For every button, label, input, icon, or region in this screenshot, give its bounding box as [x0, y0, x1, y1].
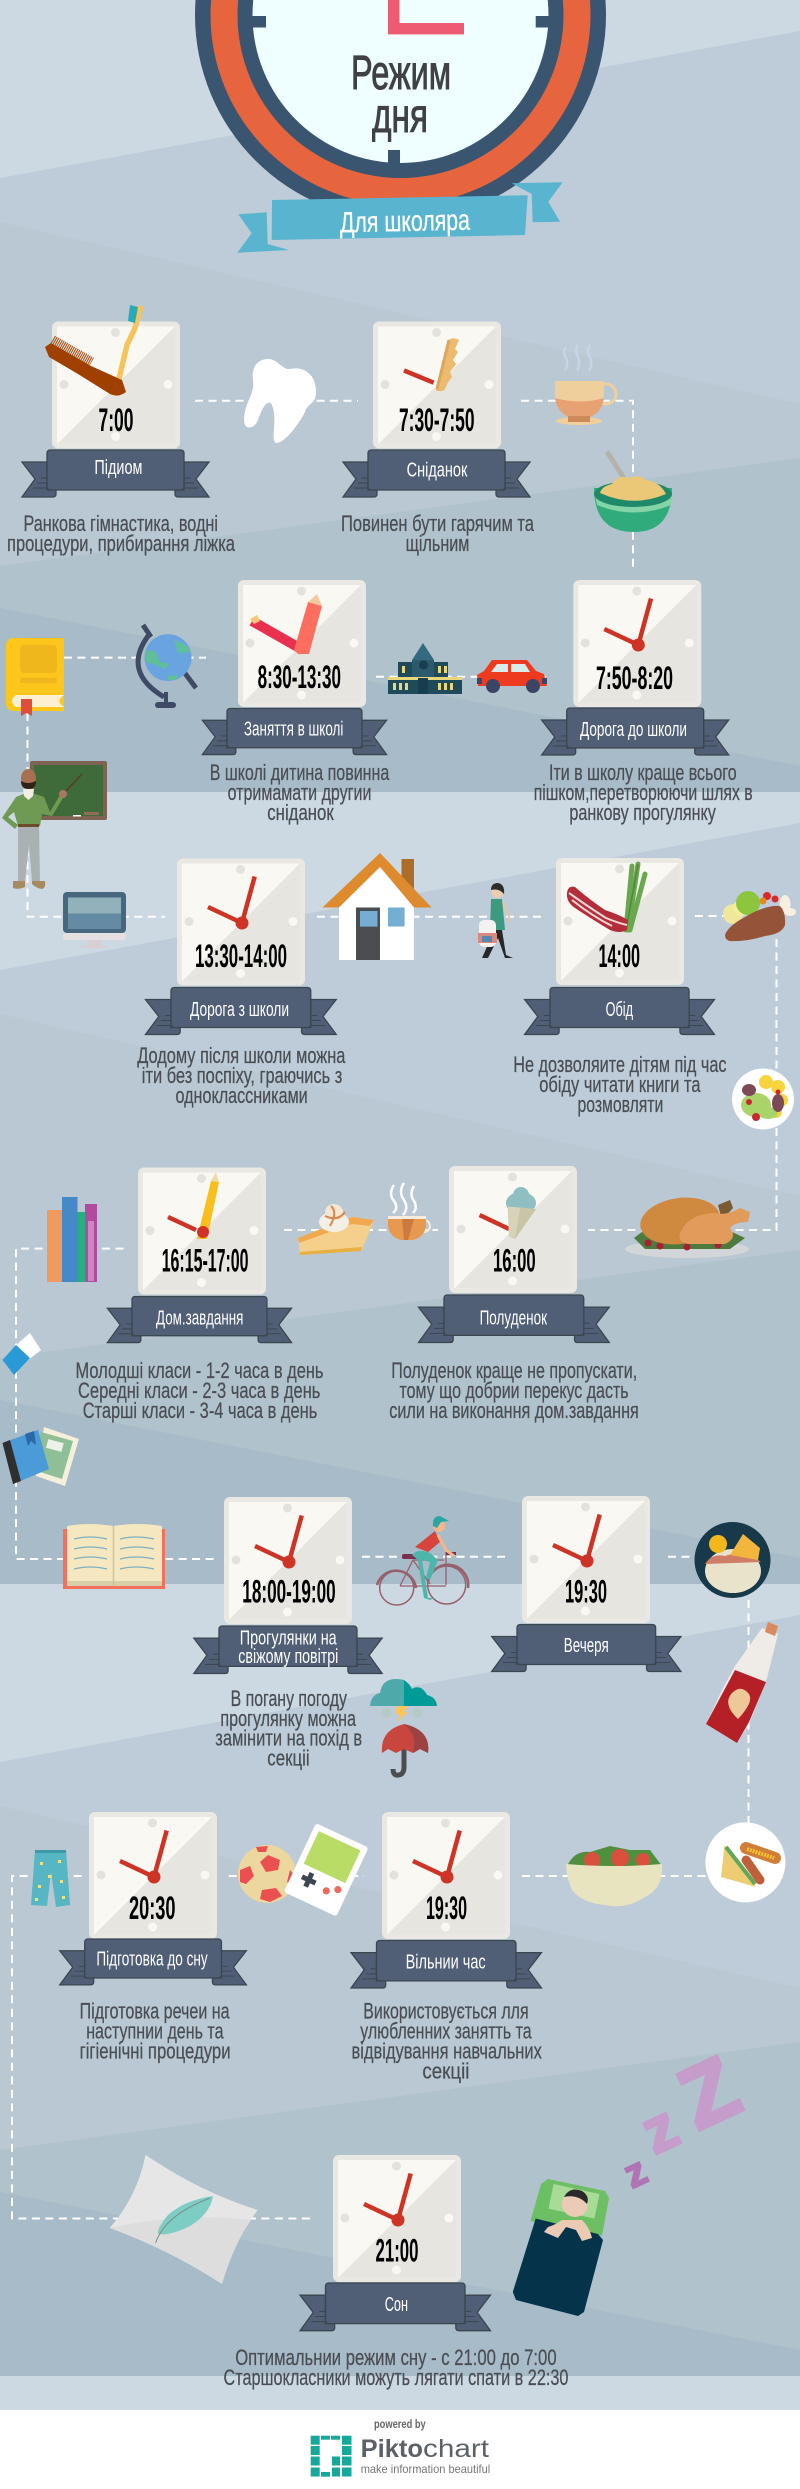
icon: yellow pencil — [197, 1172, 219, 1239]
step: 20:30 Підготовка до сну: 20:30 — [129, 1890, 176, 1926]
step: 18:00-19:00 Прогулянки: секціі — [267, 1746, 310, 1771]
icon: red car — [477, 660, 547, 693]
step: 21:00 Сон: Оптимальнии режим сну - с 21:00 до 7:00 — [235, 2345, 557, 2370]
footer: Piktochart logo — [311, 2417, 490, 2477]
footer: Piktochart logo: powered by — [374, 2417, 426, 2431]
step: 19:30 Вільний час: 19:30 — [426, 1890, 467, 1926]
icon: logo squares — [311, 2436, 352, 2477]
step: 19:30 Вільний час — [351, 1812, 542, 2084]
step: 8:30-13:30 Заняття в школі — [202, 580, 390, 825]
icon: pillow with feather — [110, 2155, 258, 2284]
step: 19:30 Вечеря: Вечеря — [564, 1634, 609, 1657]
step: 19:30 Вільний час: Вільнии час — [406, 1950, 486, 1974]
step: 7:50-8:20 Дорога до школи: 7:50-8:20 — [596, 660, 673, 696]
step: 21:00 Сон: Сон — [385, 2293, 408, 2316]
title — [351, 47, 451, 143]
step: 20:30 Підготовка до сну: Підготовка речеи на — [80, 1999, 230, 2024]
step: 13:30-14:00 Дорога з школи: Додому після школи можна — [137, 1043, 346, 1068]
step: 16:00 Полуденок: 16:00 — [493, 1243, 536, 1279]
icon: porridge bowl — [594, 452, 672, 532]
step: 16:00 Полуденок — [389, 1166, 639, 1423]
icon: dinner plate — [694, 1522, 770, 1598]
step: 8:30-13:30 Заняття в школі: 8:30-13:30 — [258, 659, 341, 695]
step: 13:30-14:00 Дорога з школи: іти без поспіху, граючись з — [142, 1063, 342, 1088]
step: 18:00-19:00 Прогулянки: Прогулянки на — [240, 1626, 337, 1650]
icon: pita wrap — [566, 1846, 662, 1906]
icon: zzz sleep letters: z — [631, 2092, 689, 2168]
step: 18:00-19:00 Прогулянки: свіжому повітрі — [238, 1645, 338, 1668]
step: 16:15-17:00 Дом.завдання — [76, 1168, 324, 1423]
step: 16:00 Полуденок: Полуденок краще не пропускати, — [391, 1358, 637, 1383]
step: 7:30-7:50 Сніданок: 7:30-7:50 — [399, 402, 474, 438]
title: дня — [372, 90, 428, 143]
step: 19:30 Вечеря: 19:30 — [565, 1574, 607, 1610]
footer: Piktochart logo: make information beautiful — [361, 2462, 490, 2476]
step: 16:00 Полуденок: Полуденок — [480, 1306, 548, 1329]
step: 18:00-19:00 Прогулянки: прогулянку можна — [220, 1706, 357, 1731]
step: 7:00 Підйом: Ранкова гімнастика, водні — [24, 511, 218, 536]
icon: eraser — [2, 1333, 41, 1375]
step: 7:00 Підйом: Підиом — [94, 456, 142, 479]
step: 14:00 Обід: Не дозволяите дітям під час — [513, 1052, 726, 1077]
icon: storm cloud — [370, 1679, 437, 1722]
step: 7:50-8:20 Дорога до школи: ранкову прогулянку — [569, 800, 716, 825]
icon: notebooks — [2, 1427, 79, 1486]
icon: tooth — [244, 359, 316, 443]
step: 7:50-8:20 Дорога до школи: Іти в школу краще всього — [549, 760, 737, 785]
step: 18:00-19:00 Прогулянки: замінити на похід в — [215, 1726, 362, 1750]
step: 19:30 Вільний час: улюбленних занятть та — [360, 2019, 532, 2044]
icon: umbrella — [382, 1724, 428, 1775]
step: 16:15-17:00 Дом.завдання: Середні класи - 2-3 часа в день — [78, 1378, 320, 1403]
icon: roast turkey — [625, 1193, 750, 1258]
step: 8:30-13:30 Заняття в школі: Заняття в школі — [244, 718, 343, 740]
step: 14:00 Обід: обіду читати книги та — [539, 1072, 701, 1097]
icon: comb and toothbrush — [45, 305, 141, 396]
step: 19:30 Вільний час: секціі — [422, 2059, 469, 2084]
icon: sandwich plate — [705, 1822, 785, 1902]
icon: pen and pencil — [250, 594, 322, 654]
step: 16:15-17:00 Дом.завдання: Дом.завдання — [156, 1306, 243, 1329]
icon: breakfast fork — [436, 338, 459, 391]
step: 16:00 Полуденок: сили на виконання дом.завдання — [389, 1398, 639, 1423]
step: 13:30-14:00 Дорога з школи: Дорога з школи — [190, 998, 289, 1021]
step: 16:15-17:00 Дом.завдання: 16:15-17:00 — [162, 1243, 248, 1279]
step: 19:30 Вільний час: відвідування навчальних — [352, 2039, 542, 2064]
icon: house — [322, 853, 432, 960]
step: 13:30-14:00 Дорога з школи: одноклассниками — [176, 1083, 308, 1108]
icon: asparagus and bacon — [567, 864, 645, 932]
subtitle ribbon — [237, 182, 563, 253]
icon: handheld game console — [284, 1823, 368, 1917]
step: 16:15-17:00 Дом.завдання: Старші класи - 3-4 часа в день — [83, 1398, 317, 1423]
dashed connector path — [12, 401, 776, 2219]
step: 7:30-7:50 Сніданок — [341, 322, 535, 556]
step: 19:30 Вечеря — [492, 1496, 681, 1672]
subtitle ribbon: Для школяра — [340, 205, 471, 239]
icon: salad plate — [732, 1068, 794, 1130]
step: 18:00-19:00 Прогулянки: 18:00-19:00 — [242, 1574, 336, 1610]
icon: zzz sleep letters — [617, 2039, 753, 2197]
icon: cup of tea — [388, 1183, 430, 1240]
step: 20:30 Підготовка до сну: гігіенічні процедури — [80, 2039, 231, 2064]
icon: stacked books — [47, 1197, 97, 1282]
step: 18:00-19:00 Прогулянки: В погану погоду — [231, 1686, 347, 1711]
icon: pie slice — [298, 1204, 374, 1255]
icon: open book — [63, 1524, 165, 1589]
icon: zzz sleep letters: z — [617, 2149, 654, 2197]
step: 21:00 Сон: Старшокласники можуть лягати спати в 22:30 — [224, 2365, 568, 2390]
step: 19:30 Вільний час: Використовується лля — [363, 1999, 529, 2024]
title: Режим — [351, 47, 451, 100]
step: 16:00 Полуденок: тому що добрии перекус дасть — [400, 1378, 629, 1403]
header clock with title — [195, 0, 606, 220]
icon: wine bottle — [706, 1622, 778, 1743]
step: 7:00 Підйом: процедури, прибирання ліжка — [7, 531, 236, 556]
icon: ice cream — [506, 1187, 536, 1239]
step: 13:30-14:00 Дорога з школи — [137, 858, 346, 1108]
step: 7:00 Підйом — [7, 322, 236, 556]
icon: teacher — [2, 769, 82, 889]
step: 14:00 Обід: Обід — [606, 998, 633, 1021]
step: 7:30-7:50 Сніданок: Сніданок — [407, 458, 468, 482]
icon: yellow book — [6, 638, 64, 716]
step: 14:00 Обід — [513, 858, 726, 1117]
step: 20:30 Підготовка до сну: наступнии день та — [86, 2019, 224, 2044]
icon: student with backpack — [478, 883, 513, 958]
step: 18:00-19:00 Прогулянки — [194, 1497, 382, 1771]
footer: Piktochart logo: Pikto — [361, 2435, 423, 2463]
step: 20:30 Підготовка до сну — [60, 1812, 246, 2064]
step: 8:30-13:30 Заняття в школі: отримамати другии — [228, 780, 371, 805]
step: 7:30-7:50 Сніданок: Повинен бути гарячим та — [341, 511, 535, 536]
step: 20:30 Підготовка до сну: Підготовка до сну — [96, 1948, 208, 1971]
icon: zzz sleep letters: Z — [665, 2039, 753, 2148]
icon: globe — [138, 625, 196, 708]
icon: tea cup — [555, 345, 616, 425]
step: 21:00 Сон: 21:00 — [376, 2233, 418, 2269]
step: 14:00 Обід: 14:00 — [598, 938, 640, 974]
icon: football — [238, 1845, 296, 1903]
step: 14:00 Обід: розмовляти — [578, 1092, 663, 1117]
step: 7:30-7:50 Сніданок: щільним — [406, 531, 469, 556]
icon: sleeping child — [513, 2179, 609, 2316]
icon: pyjama trousers — [31, 1850, 70, 1907]
footer: Piktochart logo: chart — [423, 2435, 489, 2463]
step: 7:50-8:20 Дорога до школи — [534, 580, 753, 825]
step: 8:30-13:30 Заняття в школі: сніданок — [267, 800, 334, 825]
step: 13:30-14:00 Дорога з школи: 13:30-14:00 — [195, 938, 287, 974]
icon: school building — [388, 643, 462, 694]
step: 21:00 Сон — [224, 2155, 568, 2390]
icon: cyclist — [377, 1516, 468, 1605]
step: 16:15-17:00 Дом.завдання: Молодші класи - 1-2 часа в день — [76, 1358, 324, 1383]
step: 8:30-13:30 Заняття в школі: В школі дитина повинна — [210, 760, 390, 785]
icon: computer monitor — [63, 892, 126, 948]
step: 7:50-8:20 Дорога до школи: Дорога до школи — [580, 718, 687, 741]
icon: steak with vegetables — [723, 891, 796, 941]
step: 7:00 Підйом: 7:00 — [98, 402, 134, 438]
icon: chalkboard — [30, 761, 107, 820]
